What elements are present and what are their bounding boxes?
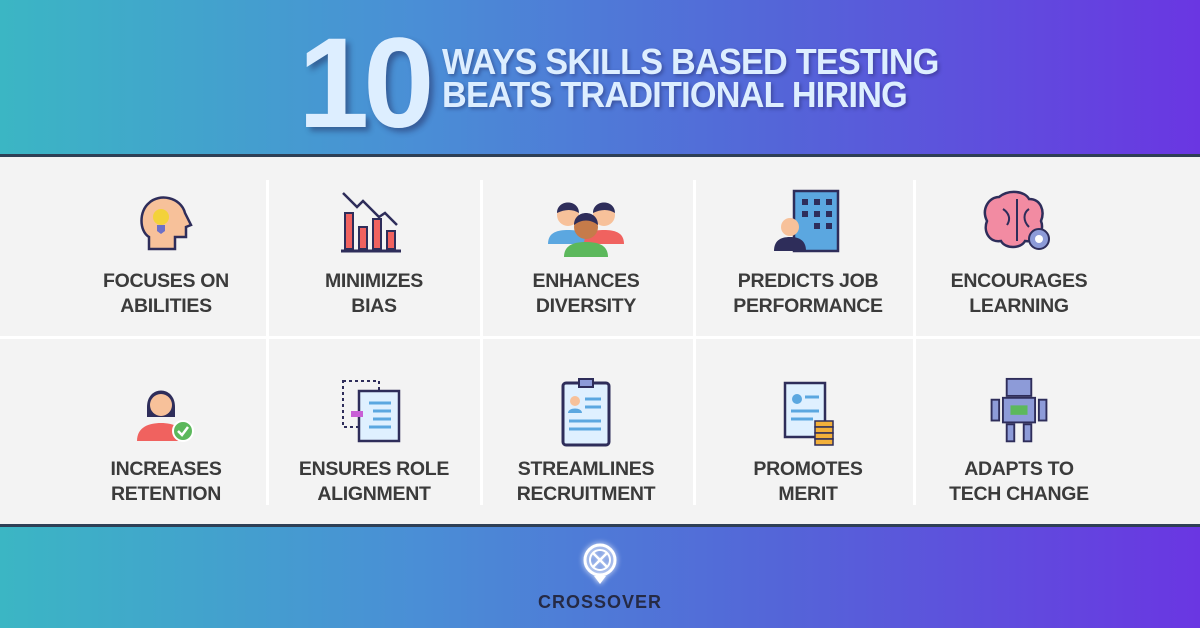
cell: increases retention: INCREASES [110, 458, 222, 480]
cell: streamlines recruitment [517, 378, 656, 505]
cell: encourages learning: ENCOURAGES [951, 270, 1087, 292]
title text: BEATS TRADITIONAL HIRING [442, 74, 907, 115]
panel: grid of benefits [0, 157, 1200, 525]
cell: ensures role alignment: ALIGNMENT [317, 483, 431, 505]
cell: ensures role alignment: ENSURES ROLE [299, 458, 449, 480]
cell: focuses on abilities [103, 196, 229, 317]
cell: encourages learning: LEARNING [969, 295, 1069, 317]
logo: crossover: CROSSOVER [538, 592, 662, 612]
cell: enhances diversity [532, 202, 640, 317]
icon: people group [548, 202, 624, 257]
cell: ensures role alignment [299, 380, 449, 505]
cell: increases retention: RETENTION [111, 483, 221, 505]
title text: WAYS SKILLS BASED TESTING [442, 41, 939, 82]
icon: resume with coins [784, 382, 834, 446]
cell: adapts to tech change: TECH CHANGE [949, 483, 1089, 505]
cell: minimizes bias: MINIMIZES [325, 270, 423, 292]
cell: predicts job performance: PERFORMANCE [733, 295, 883, 317]
footer band [0, 527, 1200, 628]
title text [442, 41, 941, 115]
icon: clipboard resume [562, 378, 610, 446]
icon: head with bulb [140, 196, 193, 250]
cell: promotes merit: MERIT [778, 483, 838, 505]
icon: person with check [137, 390, 194, 442]
icon: robot [990, 378, 1048, 442]
icon: building with person [774, 190, 840, 252]
cell: increases retention [110, 390, 222, 505]
cell: focuses on abilities: ABILITIES [120, 295, 212, 317]
cell: adapts to tech change: ADAPTS TO [964, 458, 1074, 480]
icon: documents [342, 380, 400, 442]
cell: promotes merit: PROMOTES [753, 458, 863, 480]
logo: crossover [538, 539, 662, 612]
cell: encourages learning [951, 190, 1087, 317]
header band [0, 0, 1200, 155]
cell: enhances diversity: DIVERSITY [536, 295, 636, 317]
cell: promotes merit [753, 382, 863, 505]
icon: bar chart down [341, 192, 401, 252]
cell: predicts job performance: PREDICTS JOB [738, 270, 878, 292]
cell: minimizes bias: BIAS [351, 295, 397, 317]
cell: focuses on abilities: FOCUSES ON [103, 270, 229, 292]
cell: minimizes bias [325, 192, 423, 317]
icon: brain with gear [984, 190, 1050, 250]
cell: predicts job performance [733, 190, 883, 317]
cell: adapts to tech change [949, 378, 1089, 505]
title number: 10 [298, 12, 428, 155]
cell: enhances diversity: ENHANCES [532, 270, 640, 292]
cell: streamlines recruitment: STREAMLINES [518, 458, 654, 480]
cell: streamlines recruitment: RECRUITMENT [517, 483, 655, 505]
